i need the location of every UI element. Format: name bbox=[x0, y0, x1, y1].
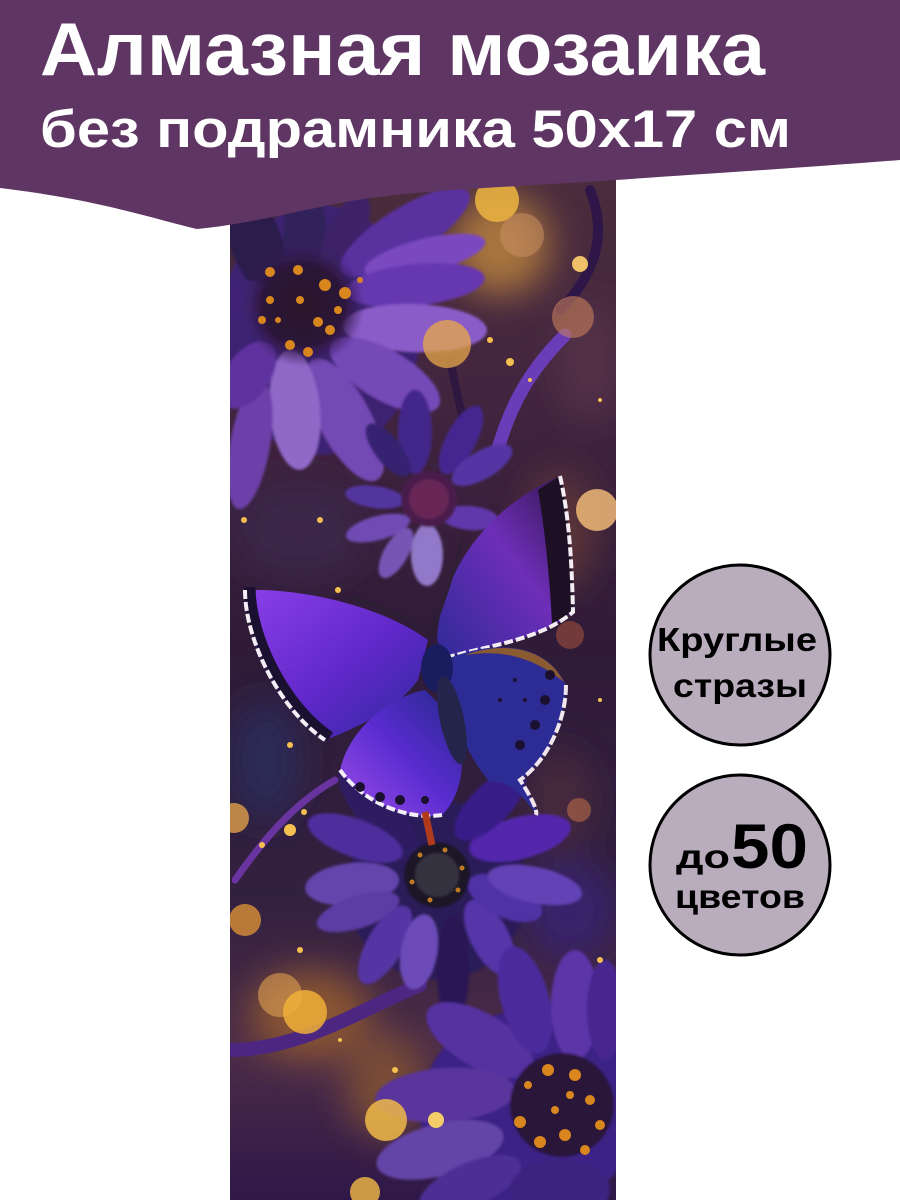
stems bbox=[230, 190, 598, 1050]
upper left wing dark margin and edge bbox=[250, 587, 330, 737]
bokeh lights bbox=[219, 178, 618, 1200]
bottom flower pollen bbox=[514, 1064, 605, 1155]
lower left wing bbox=[340, 690, 462, 816]
lower right wing bbox=[445, 647, 566, 815]
subtitle: без подрамника 50х17 см bbox=[40, 100, 791, 159]
red feet detail bbox=[425, 812, 432, 845]
lower flower pollen bbox=[410, 848, 464, 902]
upper right wing bbox=[437, 476, 573, 658]
upper right wing dark margin bbox=[538, 476, 573, 624]
flower: top left daisy bbox=[230, 189, 489, 510]
lower right wing golden band bbox=[465, 648, 564, 682]
top flower pollen bbox=[258, 265, 363, 357]
badge: round rhinestones bbox=[650, 565, 830, 745]
title: Алмазная мозаика bbox=[40, 7, 766, 91]
flower: bottom right daisy bbox=[374, 945, 616, 1200]
header banner bbox=[0, 0, 900, 229]
upper left wing white edge bbox=[245, 590, 325, 740]
lower right wing margin bbox=[520, 685, 566, 815]
flower: middle small daisy bbox=[343, 390, 518, 586]
badge: round rhinestones: Круглые bbox=[657, 621, 817, 658]
artwork: butterfly on purple flowers bbox=[230, 180, 616, 1200]
body bbox=[421, 644, 453, 692]
badge: up to 50 colours bbox=[650, 775, 830, 955]
badge: up to 50 colours: до bbox=[676, 838, 730, 875]
upper left wing bbox=[245, 590, 428, 740]
lower left wing edge bbox=[340, 770, 442, 816]
flower: lower large daisy bbox=[304, 770, 584, 1004]
badge: up to 50 colours: цветов bbox=[675, 878, 805, 915]
wing spots bbox=[355, 670, 555, 805]
butterfly bbox=[245, 476, 573, 845]
warm glow background bbox=[230, 195, 620, 1135]
badge: round rhinestones: стразы bbox=[673, 667, 807, 704]
antennae bbox=[345, 540, 463, 635]
badge: up to 50 colours: 50 bbox=[731, 812, 808, 882]
upper right wing edge bbox=[445, 476, 573, 658]
